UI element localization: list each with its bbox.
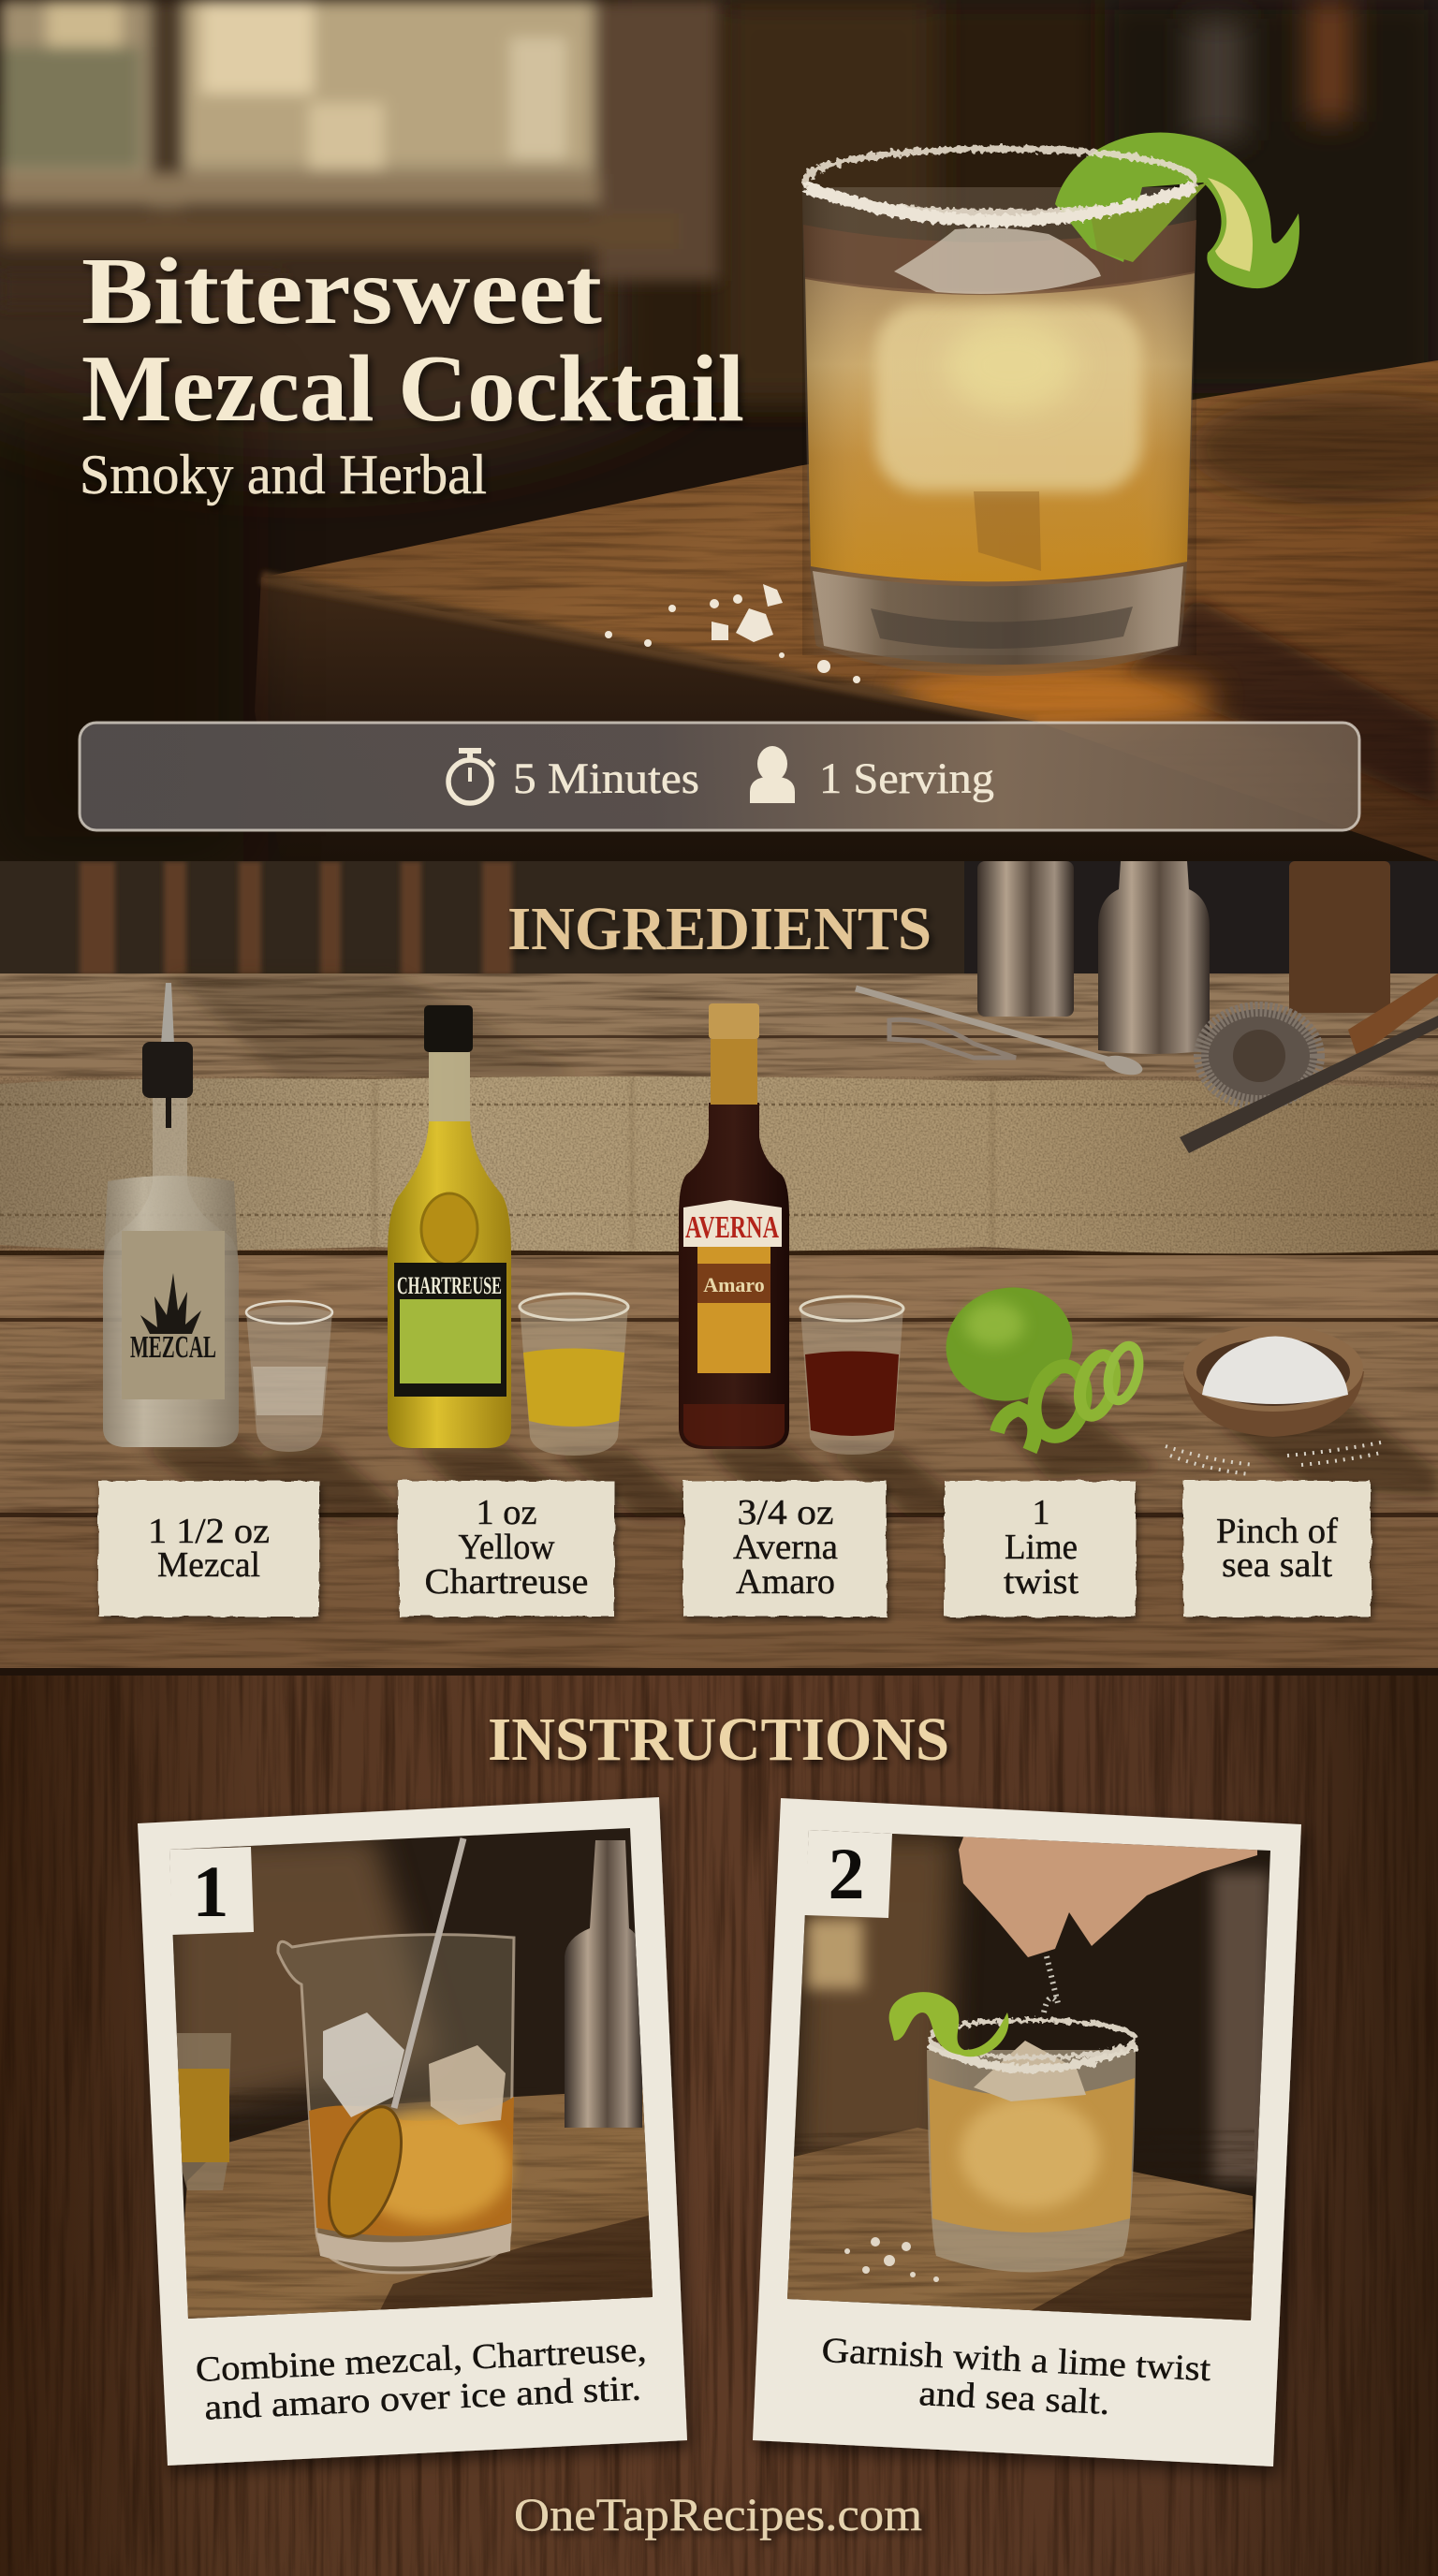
text: time: 5 Minutes <box>513 754 699 803</box>
bar tools: shakers <box>977 861 1390 1054</box>
lime twist <box>997 1342 1144 1451</box>
subtitle: Smoky and Herbal <box>80 444 487 505</box>
heading: instructions: INSTRUCTIONS <box>488 1705 949 1774</box>
salt flakes <box>605 584 860 683</box>
icon: person <box>750 746 795 803</box>
bottle: mezcal: MEZCAL <box>130 1330 216 1365</box>
photo: stirring in mixing glass <box>159 1825 674 2321</box>
caption: step 2 <box>819 2331 1212 2427</box>
caption: step 2: and sea salt. <box>918 2374 1110 2422</box>
bowl of sea salt <box>1183 1325 1364 1437</box>
badge: step 2 <box>804 1830 892 1918</box>
badge: step 1: 1 <box>193 1851 228 1932</box>
panel: ingredients <box>0 861 1438 1676</box>
card: lime twist <box>945 1481 1136 1617</box>
card: sea salt: sea salt <box>1222 1545 1332 1585</box>
left dark vignette <box>17 382 278 588</box>
caption: step 1 <box>195 2330 649 2428</box>
card: chartreuse <box>399 1481 614 1617</box>
bottle: averna amaro: Amaro <box>703 1273 765 1296</box>
caption: step 2: Garnish with a lime twist <box>821 2331 1212 2389</box>
text: servings: 1 Serving <box>819 754 994 803</box>
badge: step 1 <box>169 1847 254 1935</box>
lime wedge garnish <box>1055 133 1299 288</box>
bottle: averna amaro: AVERNA <box>685 1210 779 1245</box>
card: sea salt <box>1183 1481 1371 1617</box>
card: chartreuse: 1 oz <box>476 1493 537 1532</box>
burlap table runner <box>0 1076 1438 1254</box>
card: averna: Amaro <box>736 1562 835 1602</box>
bottle: yellow chartreuse <box>388 1005 511 1448</box>
bottle: yellow chartreuse: CHARTREUSE <box>397 1272 502 1299</box>
time and serving bar <box>80 723 1359 830</box>
backdrop: sunlit window <box>0 0 1438 459</box>
caption: step 1: Combine mezcal, Chartreuse, <box>195 2330 647 2390</box>
caption: step 1: and amaro over ice and stir. <box>203 2368 642 2428</box>
cocktail glass <box>802 187 1196 676</box>
card: sea salt: Pinch of <box>1216 1512 1338 1551</box>
panel: hero <box>0 0 1438 861</box>
card: lime twist: 1 <box>1032 1493 1050 1532</box>
wooden table <box>255 356 1438 861</box>
measuring glass: chartreuse <box>520 1294 628 1456</box>
title <box>82 256 743 427</box>
badge: step 2: 2 <box>828 1833 865 1914</box>
card: mezcal <box>98 1481 319 1617</box>
bottle: averna amaro <box>679 1003 789 1449</box>
card: chartreuse: Yellow <box>459 1528 555 1567</box>
card: lime twist: Lime <box>1005 1528 1078 1567</box>
heading: ingredients: INGREDIENTS <box>507 895 932 963</box>
shot glass: mezcal <box>246 1301 332 1452</box>
wooden table <box>0 973 1438 1676</box>
bottles in the dark background <box>1189 0 1353 140</box>
measuring glass: averna <box>800 1296 903 1455</box>
title: Mezcal Cocktail <box>81 336 744 442</box>
title: Bittersweet <box>81 239 602 344</box>
scattered salt <box>1166 1442 1386 1474</box>
card: averna: Averna <box>733 1528 838 1567</box>
card: averna: 3/4 oz <box>738 1493 833 1532</box>
card: averna <box>683 1481 887 1617</box>
card: mezcal: 1 1/2 oz <box>148 1512 270 1551</box>
salted rim <box>805 149 1195 221</box>
card: chartreuse: Chartreuse <box>425 1562 588 1602</box>
step card 1 <box>138 1797 687 2466</box>
step card 2 <box>753 1798 1301 2466</box>
bar tools: spoon and strainer <box>856 973 1438 1153</box>
footer website: OneTapRecipes.com <box>514 2488 922 2540</box>
cast shadows <box>140 1395 1438 1521</box>
backdrop: chairs and wall <box>0 861 1438 978</box>
panel: instructions <box>0 1676 1438 2576</box>
icon: stopwatch <box>448 751 494 803</box>
card: lime twist: twist <box>1004 1562 1078 1602</box>
lime <box>933 1273 1085 1415</box>
card: mezcal: Mezcal <box>157 1545 260 1585</box>
photo: garnish and salt <box>777 1825 1283 2326</box>
bottle: mezcal <box>103 983 239 1447</box>
dark wood background <box>0 1676 1438 2576</box>
